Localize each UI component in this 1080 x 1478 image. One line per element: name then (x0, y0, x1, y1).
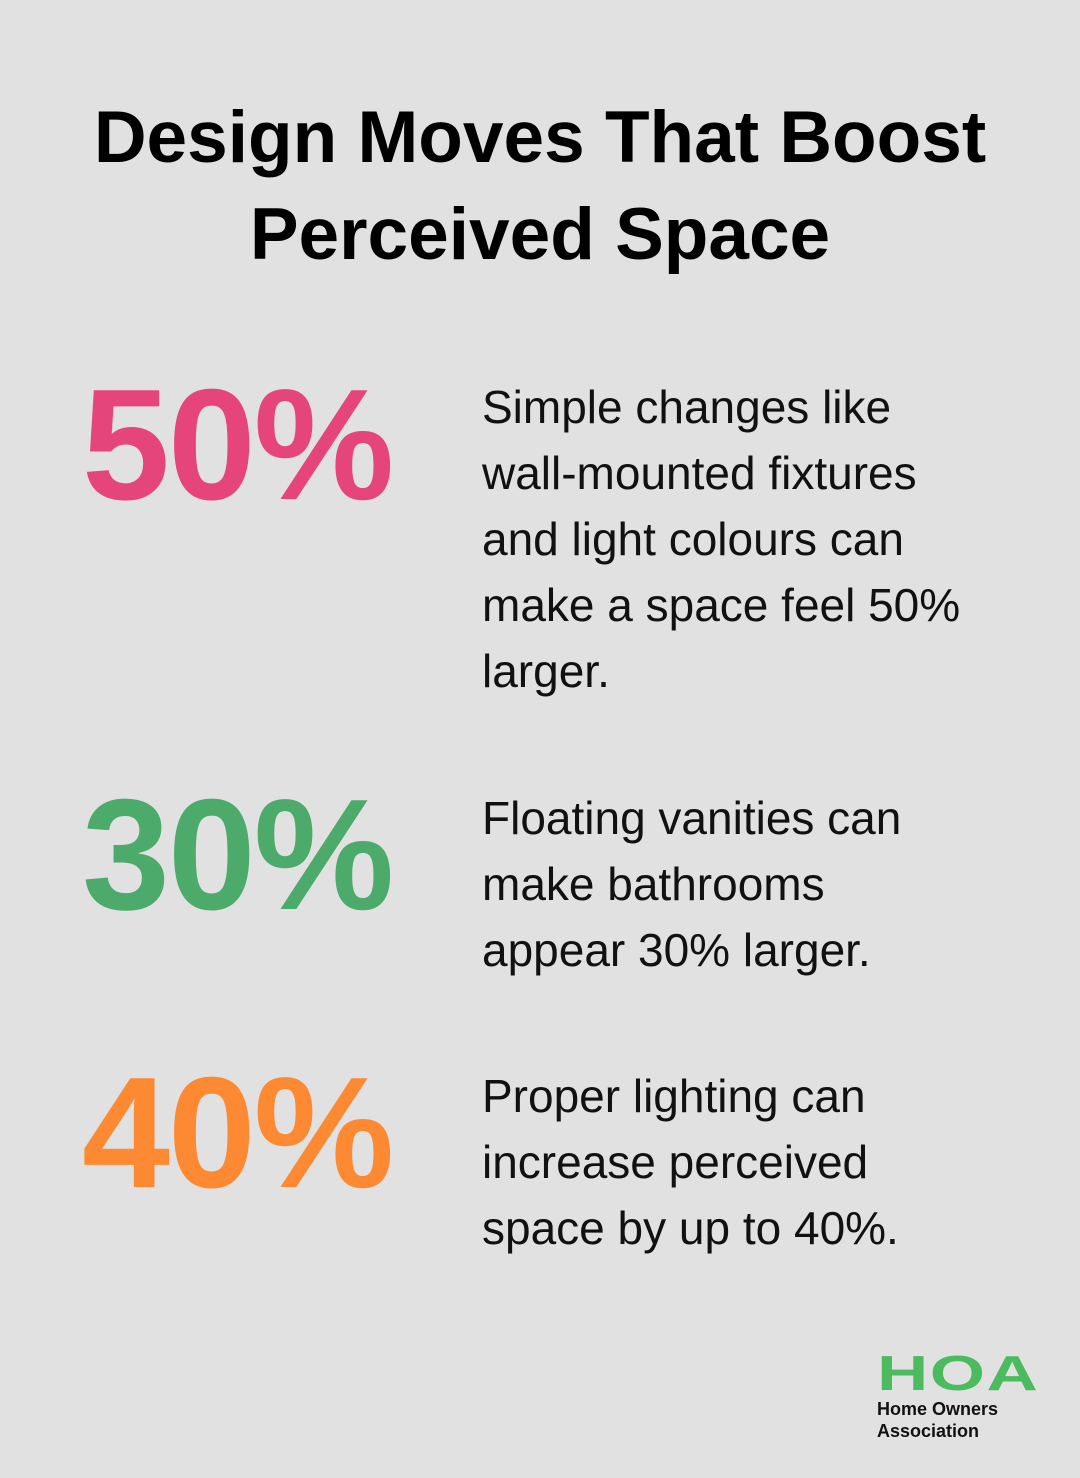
text: 50% description: and light colours can (482, 513, 904, 565)
text: 40% description: increase perceived (482, 1136, 868, 1188)
text: 30% description: appear 30% larger. (482, 924, 871, 976)
text: 40% description (482, 1070, 899, 1254)
stat: 30%: 30% (82, 767, 392, 943)
text: 40% description: Proper lighting can (482, 1070, 866, 1122)
text: 50% description: make a space feel 50% (482, 579, 960, 631)
stat: 50%: 50% (82, 357, 392, 533)
text: 50% description: wall-mounted fixtures (482, 447, 917, 499)
text: 30% description (482, 792, 901, 976)
text: 40% description: space by up to 40%. (482, 1202, 899, 1254)
title: Perceived Space (250, 194, 830, 275)
logo: HOA (877, 1347, 1039, 1441)
title (94, 97, 986, 275)
text: 30% description: make bathrooms (482, 858, 825, 910)
logo: HOA: HOA (877, 1347, 1039, 1401)
text: 50% description: larger. (482, 645, 610, 697)
text: 50% description (482, 381, 960, 697)
text: 30% description: Floating vanities can (482, 792, 901, 844)
logo: HOA: Association (877, 1421, 979, 1441)
stat: 40%: 40% (82, 1045, 392, 1221)
logo: HOA: Home Owners (877, 1399, 998, 1419)
text: 50% description: Simple changes like (482, 381, 891, 433)
title: Design Moves That Boost (94, 97, 986, 178)
